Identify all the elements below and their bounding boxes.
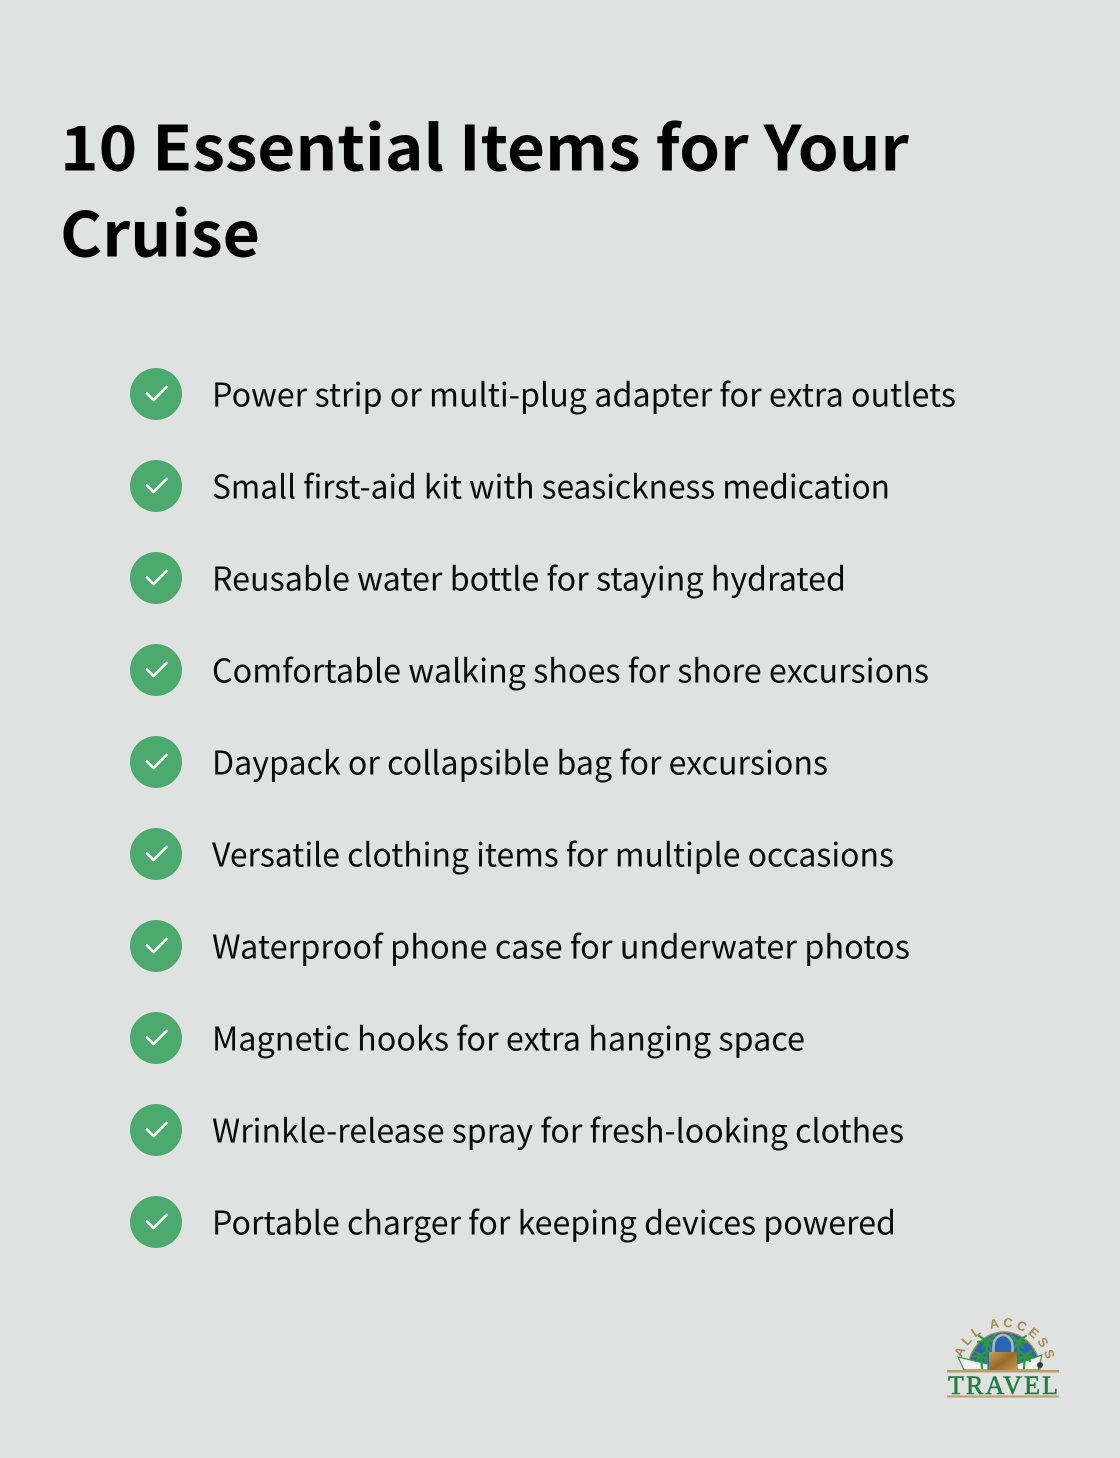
logo boats	[958, 1355, 1043, 1370]
logo padlock	[989, 1335, 1017, 1371]
title	[60, 98, 910, 274]
item 9: wrinkle spray: Wrinkle-release spray for fresh-looking clothes	[212, 1106, 904, 1152]
checklist	[130, 368, 956, 1248]
item 2: first-aid kit: Small first-aid kit with seasickness medication	[212, 462, 890, 508]
item 3: water bottle: Reusable water bottle for staying hydrated	[212, 554, 846, 600]
logo arc text	[962, 1327, 1046, 1358]
logo: All Access Travel	[947, 1318, 1059, 1400]
item 7: phone case: Waterproof phone case for underwater photos	[212, 922, 910, 968]
logo globe dome	[968, 1332, 1040, 1371]
item 10: portable charger: Portable charger for keeping devices powered	[212, 1198, 896, 1244]
logo palm trees	[973, 1335, 1033, 1368]
item 1: power strip: Power strip or multi-plug adapter for extra outlets	[212, 370, 956, 416]
logo wordmark: TRAVEL	[948, 1371, 1058, 1400]
item 4: walking shoes: Comfortable walking shoes for shore excursions	[212, 646, 929, 692]
title: Cruise	[60, 184, 260, 274]
logo rules	[947, 1370, 1059, 1398]
item 8: magnetic hooks: Magnetic hooks for extra hanging space	[212, 1014, 805, 1060]
item 5: daypack: Daypack or collapsible bag for excursions	[212, 738, 828, 784]
logo: All Access Travel: ALL ACCESS	[955, 1318, 1054, 1358]
title: 10 Essential Items for Your	[60, 98, 910, 188]
item 6: clothing: Versatile clothing items for multiple occasions	[212, 830, 894, 876]
